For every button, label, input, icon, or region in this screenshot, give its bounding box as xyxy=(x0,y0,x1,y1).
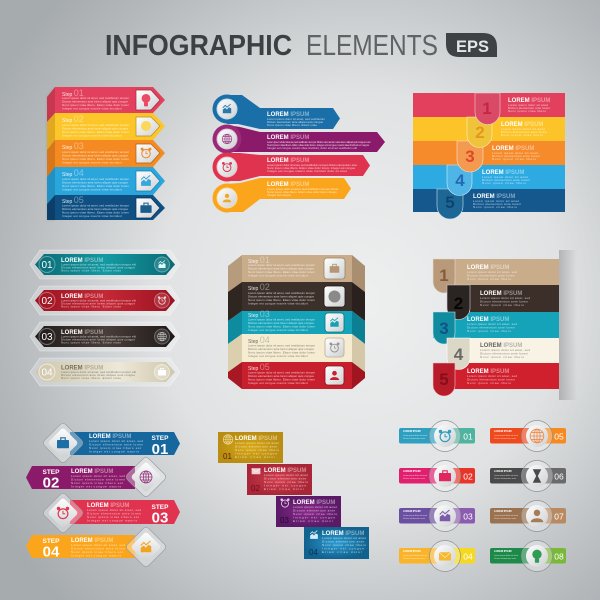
band 04 cream: Step 04 xyxy=(248,335,270,345)
tab 2 xyxy=(447,285,470,320)
tab 3 xyxy=(433,312,455,344)
band 3 teal: Nunc ipsum vitae libero xyxy=(467,329,511,333)
band 04 cream xyxy=(228,334,365,372)
step 03 xyxy=(47,140,165,177)
card 03 purple: Dictum elementum ante xyxy=(293,508,335,512)
label 04: Lorem ipsum dolor sit amet xyxy=(403,554,427,557)
step 04 orange: 04 xyxy=(43,544,60,560)
banner 02 red: LOREM IPSUM xyxy=(61,294,103,300)
tab 4 xyxy=(447,338,470,370)
band 03 teal: Dictum elementum ante lorem aliquet quis congue xyxy=(248,321,314,325)
ribbon 3: Nunc ipsum vitae libero xyxy=(492,157,536,161)
banner: orange: Integer est congue xyxy=(267,193,291,197)
banner 01 teal: Lorem ipsum dolor sit amet, sed vestibulum tempor elit xyxy=(61,262,136,266)
step 02 xyxy=(47,113,165,150)
label 06: Dictum elementum ante xyxy=(494,477,517,480)
label 01: 01 xyxy=(463,432,473,442)
ribbon 3 xyxy=(413,141,565,165)
ribbon 3: Dictum elementum ante lorem xyxy=(492,154,540,158)
label 01: Dictum elementum ante xyxy=(403,437,426,440)
card 03 purple: Integer est congue xyxy=(293,516,335,520)
step 01: Integer est congue mauris vitae tincidunt xyxy=(62,106,122,110)
label 08: LOREM IPSUM xyxy=(494,550,512,553)
band 05 red: Dictum elementum ante lorem aliquet quis congue xyxy=(248,374,314,378)
ribbon 3: Lorem ipsum dolor sit amet xyxy=(492,151,538,155)
band 01 tan: Integer est congue mauris vitae tincidunt xyxy=(248,274,308,278)
label 05: 05 xyxy=(554,432,564,442)
band 03 teal: Lorem ipsum dolor sit amet, sed vestibulum tempor xyxy=(248,318,315,322)
step 01 blue: LOREM IPSUM xyxy=(89,434,131,440)
band 4 cream xyxy=(470,338,559,363)
step 05: Integer est congue mauris vitae tincidunt xyxy=(62,214,122,218)
banner 04 beige: Lorem ipsum dolor sit amet, sed vestibulum tempor elit xyxy=(61,370,136,374)
tab 1 xyxy=(475,93,500,124)
band 02 dark xyxy=(228,282,365,321)
step 02 purple: Lorem ipsum dolor sit amet, sed xyxy=(71,474,125,478)
label 02 xyxy=(399,460,475,492)
title xyxy=(105,30,497,62)
banner 02 red: Dictum elementum ante lorem aliquet quis congue xyxy=(61,302,135,306)
label 06: Lorem ipsum dolor sit amet xyxy=(494,474,518,477)
step 01: Lorem ipsum dolor sit amet, sed vestibulum tempor xyxy=(62,96,129,100)
label 01: LOREM IPSUM xyxy=(403,430,421,433)
label 03: Lorem ipsum dolor sit amet xyxy=(403,514,427,517)
band 02 dark: Lorem ipsum dolor sit amet, sed vestibulum tempor xyxy=(248,291,315,295)
tab 2: 2 xyxy=(475,123,485,142)
ribbon 1: Dictum elementum ante lorem xyxy=(508,106,550,110)
banner 02 red: 02 xyxy=(41,296,53,307)
label 05: Lorem ipsum dolor sit amet xyxy=(494,434,518,437)
step 03 crimson: Lorem ipsum dolor sit amet, sed xyxy=(87,508,141,512)
label 02: LOREM IPSUM xyxy=(403,470,421,473)
banner 01 teal: Nunc ipsum vitae libero. Etiam vitae xyxy=(61,268,121,272)
band 3 teal: Lorem ipsum dolor sit amet, sed xyxy=(467,322,517,326)
card 01 gold: LOREM IPSUM xyxy=(235,436,277,442)
label 02: 02 xyxy=(463,472,473,482)
band 4 cream: LOREM IPSUM xyxy=(480,343,522,349)
band 5 red: LOREM IPSUM xyxy=(467,369,509,375)
step 01 blue: Lorem ipsum dolor sit amet, sed xyxy=(89,439,143,443)
label 02: Dictum elementum ante xyxy=(403,477,426,480)
card 01 gold: Nunc ipsum vitae libero xyxy=(235,448,279,452)
band 2 dark: Dictum elementum ante lorem xyxy=(480,300,528,304)
card 01 gold: Dictum elementum ante xyxy=(235,444,277,448)
label 05 xyxy=(490,420,566,452)
band 05 red: Nunc ipsum vitae libero. Etiam vitae dolor lorem xyxy=(248,378,316,382)
banner: purple xyxy=(212,124,385,154)
card 03 purple: Etiam vitae dolor xyxy=(293,519,333,523)
band 01 tan: Step 01 xyxy=(248,255,270,265)
card 02 crimson: Nunc ipsum vitae libero xyxy=(264,480,308,484)
step 02 purple: 02 xyxy=(43,474,59,492)
band 01 tan xyxy=(228,255,365,292)
panel: glass circle labels xyxy=(399,420,566,572)
tab 3 xyxy=(457,141,483,172)
ribbon 4: Lorem ipsum dolor sit amet xyxy=(482,175,528,179)
ribbon 1: Nunc ipsum vitae libero xyxy=(508,109,546,113)
step 03 crimson: STEP xyxy=(152,504,169,511)
band 5 red: Nunc ipsum vitae libero xyxy=(467,381,511,385)
step 02: Dictum elementum ante lorem aliquet quis congue xyxy=(62,126,128,130)
label 04: 04 xyxy=(463,552,473,562)
card 02 crimson: Dictum elementum ante xyxy=(264,476,306,480)
banner: purple: Nunc ipsum vitae libero. Etiam vitae dolor lorem, integer est congue mauris vitae tincidunt et magna xyxy=(267,143,369,147)
label 08: Dictum elementum ante xyxy=(494,557,517,560)
label 06: LOREM IPSUM xyxy=(494,470,512,473)
banner: crimson: LOREM IPSUM xyxy=(267,158,309,164)
step 03: Lorem ipsum dolor sit amet, sed vestibulum tempor xyxy=(62,150,129,154)
band 5 red: Lorem ipsum dolor sit amet, sed xyxy=(467,374,517,378)
step 04 orange: Integer est congue mauris xyxy=(71,554,122,558)
banner: blue: Nunc ipsum vitae libero. Etiam vitae xyxy=(267,123,317,127)
panel: five step arrows xyxy=(47,87,165,220)
step 05 xyxy=(47,195,165,220)
card 04 blue: Integer est congue xyxy=(322,546,364,550)
ribbon 2: Lorem ipsum dolor sit amet xyxy=(501,127,545,131)
ribbon 1: Lorem ipsum dolor sit amet xyxy=(508,103,548,107)
banner: purple: Lorem ipsum dolor sit amet, sed vestibulum tempor. Dictum elementum ante lorem aliquet quis congue nunc xyxy=(267,140,372,144)
title: ELEMENTS xyxy=(306,30,438,62)
step 03: Integer est congue mauris vitae tincidunt xyxy=(62,160,122,164)
step 03 crimson: Integer est congue mauris xyxy=(87,518,138,522)
card 04 blue: LOREM IPSUM xyxy=(322,531,364,537)
band 2 dark: LOREM IPSUM xyxy=(480,291,522,297)
ribbon 2: Dictum elementum ante lorem xyxy=(501,130,548,134)
label 08: Lorem ipsum dolor sit amet xyxy=(494,554,518,557)
step 01: Nunc ipsum vitae libero. Etiam vitae dolor lorem xyxy=(62,103,130,107)
band 2 dark: Lorem ipsum dolor sit amet, sed xyxy=(480,296,530,300)
step 01 blue: Nunc ipsum vitae libero est xyxy=(89,446,141,450)
tab 1 xyxy=(433,259,455,293)
label 06: 06 xyxy=(554,472,564,482)
label 03 xyxy=(399,500,475,532)
banner 03 dark: LOREM IPSUM xyxy=(61,330,103,336)
tab 2 xyxy=(467,117,492,148)
label 08: 08 xyxy=(554,552,564,562)
card 02 crimson: Lorem ipsum dolor sit amet xyxy=(264,473,308,477)
card 01 gold: Etiam vitae dolor xyxy=(235,455,275,459)
banner: blue: Lorem ipsum dolor sit amet, sed vestibulum xyxy=(267,117,326,121)
band 1 tan: Lorem ipsum dolor sit amet, sed xyxy=(467,270,517,274)
ribbon 5: LOREM IPSUM xyxy=(473,194,515,200)
band 04 cream: Integer est congue mauris vitae tincidunt xyxy=(248,354,308,358)
card 02 crimson xyxy=(247,464,312,495)
panel: numbered ribbon tabs xyxy=(413,93,565,219)
band 01 tan: Dictum elementum ante lorem aliquet quis congue xyxy=(248,266,314,270)
step 03 crimson: 03 xyxy=(152,510,168,526)
band 03 teal: Nunc ipsum vitae libero. Etiam vitae dolor lorem xyxy=(248,324,316,328)
ribbon 4: Dictum elementum ante lorem xyxy=(482,178,530,182)
ribbon 1 xyxy=(413,93,565,117)
badge: EPS xyxy=(446,33,497,57)
ribbon 4: LOREM IPSUM xyxy=(482,170,524,176)
card 02 crimson: 02 xyxy=(251,484,260,493)
step 02: Step 02 xyxy=(62,114,84,124)
step 02 purple: STEP xyxy=(43,469,60,476)
step 02 purple: Integer est congue mauris xyxy=(71,484,122,488)
card 01 gold: Integer est congue xyxy=(235,452,277,456)
band 4 cream: Lorem ipsum dolor sit amet, sed xyxy=(480,348,530,352)
band 04 cream: Nunc ipsum vitae libero. Etiam vitae dolor lorem xyxy=(248,350,316,354)
label 07 xyxy=(490,500,566,532)
band 02 dark: Nunc ipsum vitae libero. Etiam vitae dolor lorem xyxy=(248,298,316,302)
band 02 dark: Dictum elementum ante lorem aliquet quis congue xyxy=(248,294,314,298)
step 01 blue: Dictum elementum ante lorem xyxy=(89,442,144,446)
banner: orange: LOREM IPSUM xyxy=(267,182,309,188)
card 03 purple: LOREM IPSUM xyxy=(293,500,335,506)
banner: blue: LOREM IPSUM xyxy=(267,112,309,118)
banner: blue: Dictum elementum ante aliquet quis congue xyxy=(267,120,323,124)
band 05 red: Step 05 xyxy=(248,362,270,372)
label 03: LOREM IPSUM xyxy=(403,510,421,513)
label 07: 07 xyxy=(554,512,564,522)
card 03 purple xyxy=(276,496,341,527)
step 04 orange xyxy=(26,526,167,568)
band 3 teal xyxy=(433,312,559,338)
step 01 blue: Integer est congue mauris xyxy=(89,450,140,454)
band 01 tan: Lorem ipsum dolor sit amet, sed vestibulum tempor xyxy=(248,263,315,267)
label 04: LOREM IPSUM xyxy=(403,550,421,553)
step 02 purple: Nunc ipsum vitae libero est xyxy=(71,481,123,485)
ribbon 5: Nunc ipsum vitae libero xyxy=(473,205,517,209)
banner: orange: Lorem ipsum dolor sit amet, sed vestibulum tempor dictum xyxy=(267,187,340,191)
step 02: Nunc ipsum vitae libero. Etiam vitae dolor lorem xyxy=(62,130,130,134)
panel: key shaped banners xyxy=(212,94,385,212)
step 02 purple: LOREM IPSUM xyxy=(71,469,113,475)
tab 4: 4 xyxy=(454,345,464,364)
band 1 tan: LOREM IPSUM xyxy=(467,265,509,271)
step 01 blue: STEP xyxy=(152,435,169,442)
ribbon 5: Dictum elementum ante lorem xyxy=(473,202,522,206)
step 04 xyxy=(47,167,165,204)
card 04 blue: 04 xyxy=(309,548,318,557)
step 01: Dictum elementum ante lorem aliquet quis congue xyxy=(62,100,128,104)
label 02: Lorem ipsum dolor sit amet xyxy=(403,474,427,477)
label 07: LOREM IPSUM xyxy=(494,510,512,513)
step 02 purple: Dictum elementum ante lorem xyxy=(71,478,126,482)
step 05: Step 05 xyxy=(62,195,84,205)
band 01 tan: Nunc ipsum vitae libero. Etiam vitae dolor lorem xyxy=(248,270,316,274)
card 03 purple: Lorem ipsum dolor sit amet xyxy=(293,505,337,509)
panel: folded step bands xyxy=(228,255,365,389)
tab 4: 4 xyxy=(455,171,465,190)
banner 01 teal xyxy=(30,250,180,279)
banner: purple: LOREM IPSUM xyxy=(267,135,309,141)
tab 5: 5 xyxy=(439,370,449,389)
band 3 teal: LOREM IPSUM xyxy=(467,317,509,323)
ribbon 2 xyxy=(413,117,565,141)
label 05: LOREM IPSUM xyxy=(494,430,512,433)
banner: purple: Integer est congue mauris vitae tincidunt, dolor sit amet vestibulum elit xyxy=(267,146,357,150)
step 03: Step 03 xyxy=(62,141,84,151)
card 04 blue: Etiam vitae dolor xyxy=(322,550,362,554)
tab 4 xyxy=(447,165,472,196)
band 1 tan: Dictum elementum ante lorem xyxy=(467,274,516,278)
banner 04 beige xyxy=(30,358,180,386)
badge: EPS: EPS xyxy=(456,38,489,56)
banner 03 dark xyxy=(30,322,180,351)
label 04: Dictum elementum ante xyxy=(403,557,426,560)
step 03 crimson: Dictum elementum ante lorem xyxy=(87,512,142,516)
banner 03 dark: Dictum elementum ante lorem aliquet quis congue xyxy=(61,338,135,342)
band 05 red xyxy=(228,362,365,389)
step 04: Step 04 xyxy=(62,168,84,178)
label 03: Dictum elementum ante xyxy=(403,517,426,520)
banner: orange: Nunc ipsum vitae libero. Etiam vitae dolor lorem integer xyxy=(267,190,337,194)
ribbon 2: Nunc ipsum vitae libero xyxy=(501,133,543,137)
panel: diamond step arrows xyxy=(26,422,180,568)
tab 5 xyxy=(433,363,455,396)
banner 04 beige: Nunc ipsum vitae libero. Etiam vitae xyxy=(61,376,121,380)
step 04 orange: Dictum elementum ante lorem xyxy=(71,546,126,550)
step 04 orange: Nunc ipsum vitae libero est xyxy=(71,550,123,554)
label 01: Lorem ipsum dolor sit amet xyxy=(403,434,427,437)
card 01 gold: Lorem ipsum dolor sit amet xyxy=(235,441,279,445)
band 05 red: Integer est congue mauris vitae tincidunt xyxy=(248,381,308,385)
step 04: Integer est congue mauris vitae tincidunt xyxy=(62,188,122,192)
step 02: Integer est congue mauris vitae tincidunt xyxy=(62,134,122,138)
banner: crimson: Nunc ipsum vitae libero. Etiam vitae dolor lorem, integer est congue xyxy=(267,166,355,170)
banner: crimson: Lorem ipsum dolor sit amet, sed vestibulum tempor dictum elementum ante xyxy=(267,163,357,167)
ribbon 4: Nunc ipsum vitae libero xyxy=(482,181,526,185)
card 01 gold xyxy=(218,432,283,463)
banner: crimson: Integer est congue mauris vitae tincidunt dolor sit amet xyxy=(267,169,347,173)
step 04 orange: STEP xyxy=(43,538,60,545)
card 04 blue: Dictum elementum ante xyxy=(322,540,364,544)
title: INFOGRAPHIC xyxy=(105,30,292,62)
tab 3: 3 xyxy=(439,319,449,338)
step 02 purple xyxy=(26,456,167,498)
tab 1: 1 xyxy=(439,266,449,285)
panel: staircase cards xyxy=(218,432,369,559)
banner 02 red xyxy=(30,286,180,315)
ribbon 3: LOREM IPSUM xyxy=(492,146,534,152)
step 05: Lorem ipsum dolor sit amet, sed vestibulum tempor xyxy=(62,204,129,208)
ribbon 2: LOREM IPSUM xyxy=(501,122,543,128)
card 01 gold: 01 xyxy=(223,452,232,461)
tab 5 xyxy=(437,189,463,219)
banner: orange xyxy=(212,178,351,212)
label 05: Dictum elementum ante xyxy=(494,437,517,440)
band 5 red: Dictum elementum ante lorem xyxy=(467,378,516,382)
step 02: Lorem ipsum dolor sit amet, sed vestibulum tempor xyxy=(62,123,129,127)
card 04 blue: Nunc ipsum vitae libero xyxy=(322,543,366,547)
banner: crimson xyxy=(212,152,370,182)
tab 5: 5 xyxy=(445,193,455,212)
tab 1: 1 xyxy=(482,99,492,118)
tab 2: 2 xyxy=(454,294,463,313)
banner 01 teal: 01 xyxy=(41,260,53,271)
band 2 dark xyxy=(470,285,559,312)
step 04 orange: Lorem ipsum dolor sit amet, sed xyxy=(71,543,125,547)
band 02 dark: Integer est congue mauris vitae tincidunt xyxy=(248,302,308,306)
banner 01 teal: Dictum elementum ante lorem aliquet quis congue xyxy=(61,266,135,270)
step 01 blue xyxy=(42,422,180,464)
card 04 blue: Lorem ipsum dolor sit amet xyxy=(322,536,366,540)
ribbon 4 xyxy=(413,165,565,189)
step 04 orange: LOREM IPSUM xyxy=(71,538,113,544)
banner 04 beige: Dictum elementum ante lorem aliquet quis congue xyxy=(61,373,135,377)
band 1 tan: Nunc ipsum vitae libero xyxy=(467,277,511,281)
card 03 purple: Nunc ipsum vitae libero xyxy=(293,512,337,516)
banner 04 beige: LOREM IPSUM xyxy=(61,366,103,372)
card 03 purple: 03 xyxy=(280,516,289,525)
label 07: Lorem ipsum dolor sit amet xyxy=(494,514,518,517)
band 03 teal xyxy=(228,309,365,344)
card 02 crimson: Etiam vitae dolor xyxy=(264,487,304,491)
panel: numbered side tabs xyxy=(433,250,577,400)
band 04 cream: Dictum elementum ante lorem aliquet quis congue xyxy=(248,347,314,351)
banner 02 red: Lorem ipsum dolor sit amet, sed vestibulum tempor elit xyxy=(61,298,136,302)
banner 03 dark: Lorem ipsum dolor sit amet, sed vestibulum tempor elit xyxy=(61,334,136,338)
step 04: Nunc ipsum vitae libero. Etiam vitae dolor lorem xyxy=(62,184,130,188)
label 06 xyxy=(490,460,566,492)
tab 3: 3 xyxy=(465,147,475,166)
step 05: Nunc ipsum vitae libero. Etiam vitae dolor lorem xyxy=(62,210,130,214)
step 03 crimson: LOREM IPSUM xyxy=(87,503,129,509)
step 03: Nunc ipsum vitae libero. Etiam vitae dolor lorem xyxy=(62,157,130,161)
step 04: Lorem ipsum dolor sit amet, sed vestibulum tempor xyxy=(62,177,129,181)
label 07: Dictum elementum ante xyxy=(494,517,517,520)
banner 03 dark: 03 xyxy=(41,332,53,343)
label 01 xyxy=(399,420,475,452)
banner 03 dark: Nunc ipsum vitae libero. Etiam vitae xyxy=(61,340,121,344)
label 08 xyxy=(490,540,566,572)
band 4 cream: Dictum elementum ante lorem xyxy=(480,352,528,356)
step 03 crimson: Nunc ipsum vitae libero est xyxy=(87,515,139,519)
band 4 cream: Nunc ipsum vitae libero xyxy=(480,355,524,359)
step 04: Dictum elementum ante lorem aliquet quis congue xyxy=(62,180,128,184)
band 05 red: Lorem ipsum dolor sit amet, sed vestibulum tempor xyxy=(248,370,315,374)
banner 04 beige: 04 xyxy=(41,368,53,378)
panel: hexagon banners xyxy=(30,250,180,386)
band 5 red xyxy=(433,363,559,389)
step 03 crimson xyxy=(42,492,180,534)
band 04 cream: Lorem ipsum dolor sit amet, sed vestibulum tempor xyxy=(248,344,315,348)
ribbon 5: Lorem ipsum dolor sit amet xyxy=(473,199,519,203)
step 01 blue: 01 xyxy=(152,441,168,458)
band 02 dark: Step 02 xyxy=(248,282,270,292)
ribbon 1: LOREM IPSUM xyxy=(508,98,550,104)
card 04 blue xyxy=(304,527,369,559)
step 01: Step 01 xyxy=(62,88,84,98)
card 02 crimson: LOREM IPSUM xyxy=(264,468,306,474)
label 04 xyxy=(399,540,475,572)
banner 01 teal: LOREM IPSUM xyxy=(61,258,103,264)
banner 02 red: Nunc ipsum vitae libero. Etiam vitae xyxy=(61,304,121,308)
step 01 xyxy=(47,87,165,122)
step 05: Dictum elementum ante lorem aliquet quis congue xyxy=(62,207,128,211)
label 03: 03 xyxy=(463,512,473,522)
step 03: Dictum elementum ante lorem aliquet quis congue xyxy=(62,154,128,158)
band 03 teal: Integer est congue mauris vitae tincidunt xyxy=(248,328,308,332)
band 1 tan xyxy=(455,259,559,285)
banner: blue xyxy=(212,94,340,129)
band 2 dark: Nunc ipsum vitae libero xyxy=(480,303,524,307)
band 03 teal: Step 03 xyxy=(248,309,270,319)
ribbon 5 xyxy=(413,189,565,212)
card 02 crimson: Integer est congue xyxy=(264,484,306,488)
band 3 teal: Dictum elementum ante lorem xyxy=(467,326,516,330)
